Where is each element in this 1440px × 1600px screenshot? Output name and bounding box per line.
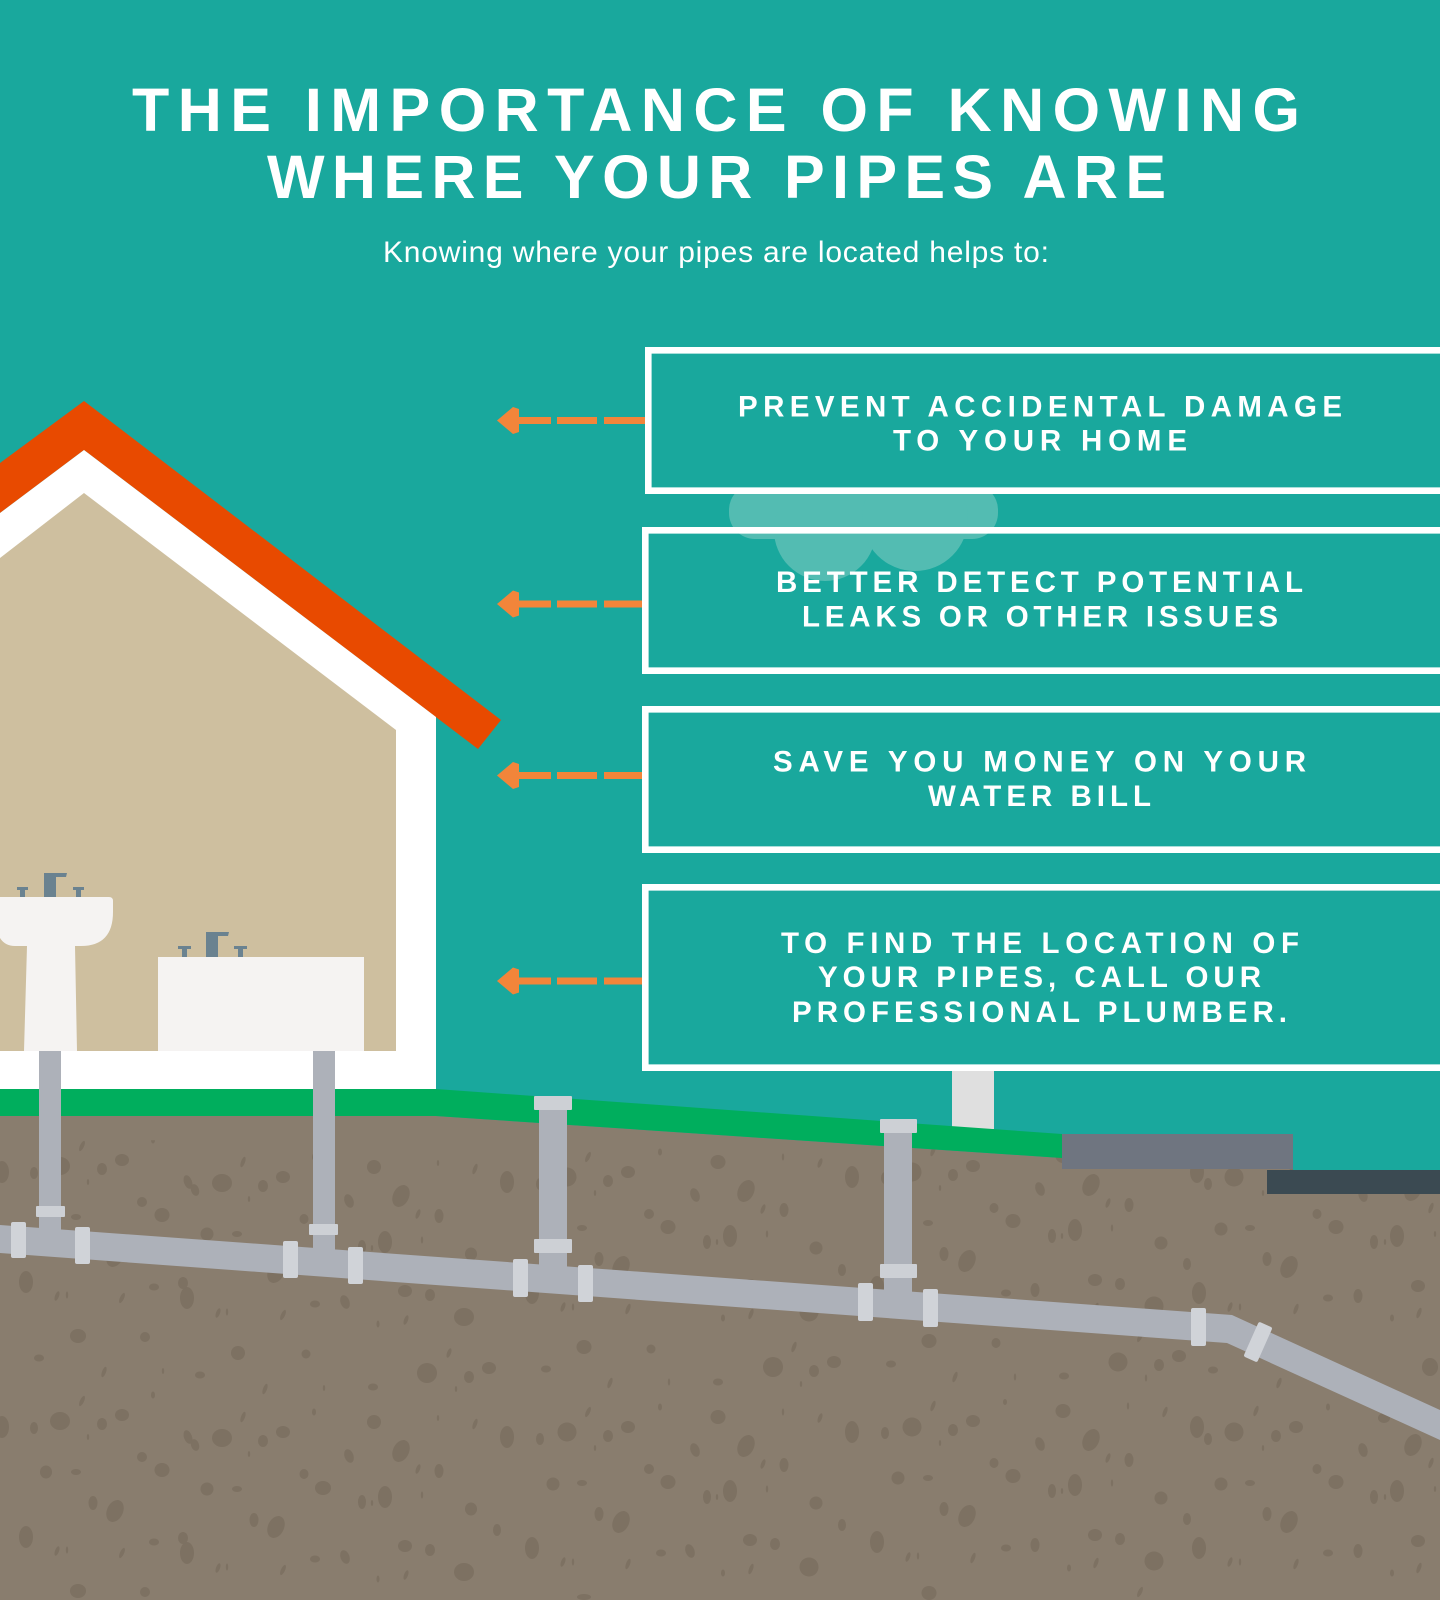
- house: [0, 401, 501, 1089]
- soil: [0, 1116, 1440, 1600]
- arrow 4: [497, 968, 642, 994]
- roof: [0, 401, 501, 749]
- panel: save money: [645, 709, 1440, 850]
- icon: pedestal sink: [0, 873, 113, 1051]
- title: [132, 76, 1300, 211]
- vertical pipe 4: [880, 1119, 917, 1298]
- vertical pipe 2: [309, 1051, 338, 1256]
- cloud: [729, 494, 998, 581]
- soil texture: [0, 1016, 1438, 1600]
- icon: vanity sink: [158, 932, 364, 1051]
- vertical pipe 1: [36, 1051, 65, 1236]
- house walls: [0, 450, 436, 1089]
- panel: call our plumber: YOUR PIPES, CALL OUR: [818, 961, 1261, 994]
- panel: prevent accidental damage: PREVENT ACCIDENTAL DAMAGE: [738, 390, 1342, 424]
- main sewer line: [0, 1225, 1440, 1440]
- pipes: [0, 1051, 1440, 1440]
- house interior: [0, 493, 396, 1051]
- grass: [0, 1089, 1062, 1158]
- panel: call our plumber: TO FIND THE LOCATION OF: [781, 927, 1299, 960]
- panel: better detect leaks: LEAKS OR OTHER ISSUES: [802, 600, 1278, 634]
- driveway slab: [1062, 1134, 1293, 1169]
- panel: save money: SAVE YOU MONEY ON YOUR: [773, 746, 1306, 778]
- panel: better detect leaks: BETTER DETECT POTENTIAL: [776, 566, 1303, 599]
- sign post: [952, 1071, 994, 1129]
- panel: prevent accidental damage: TO YOUR HOME: [893, 424, 1187, 458]
- subtitle: Knowing where your pipes are located helps to:: [383, 236, 1049, 269]
- panel: save money: WATER BILL: [928, 780, 1151, 813]
- arrow 1: [497, 407, 645, 434]
- panel: better detect leaks: [645, 530, 1440, 671]
- panel: call our plumber: [645, 887, 1440, 1068]
- road: [1267, 1170, 1440, 1194]
- arrow 3: [497, 762, 642, 789]
- arrow 2: [497, 590, 642, 618]
- panel: call our plumber: PROFESSIONAL PLUMBER.: [792, 996, 1287, 1029]
- panel: prevent accidental damage: [648, 350, 1440, 491]
- title: WHERE YOUR PIPES ARE: [267, 143, 1166, 211]
- pipe couplings: [11, 1222, 1273, 1362]
- vertical pipe 3: [534, 1096, 572, 1280]
- title: THE IMPORTANCE OF KNOWING: [132, 76, 1300, 144]
